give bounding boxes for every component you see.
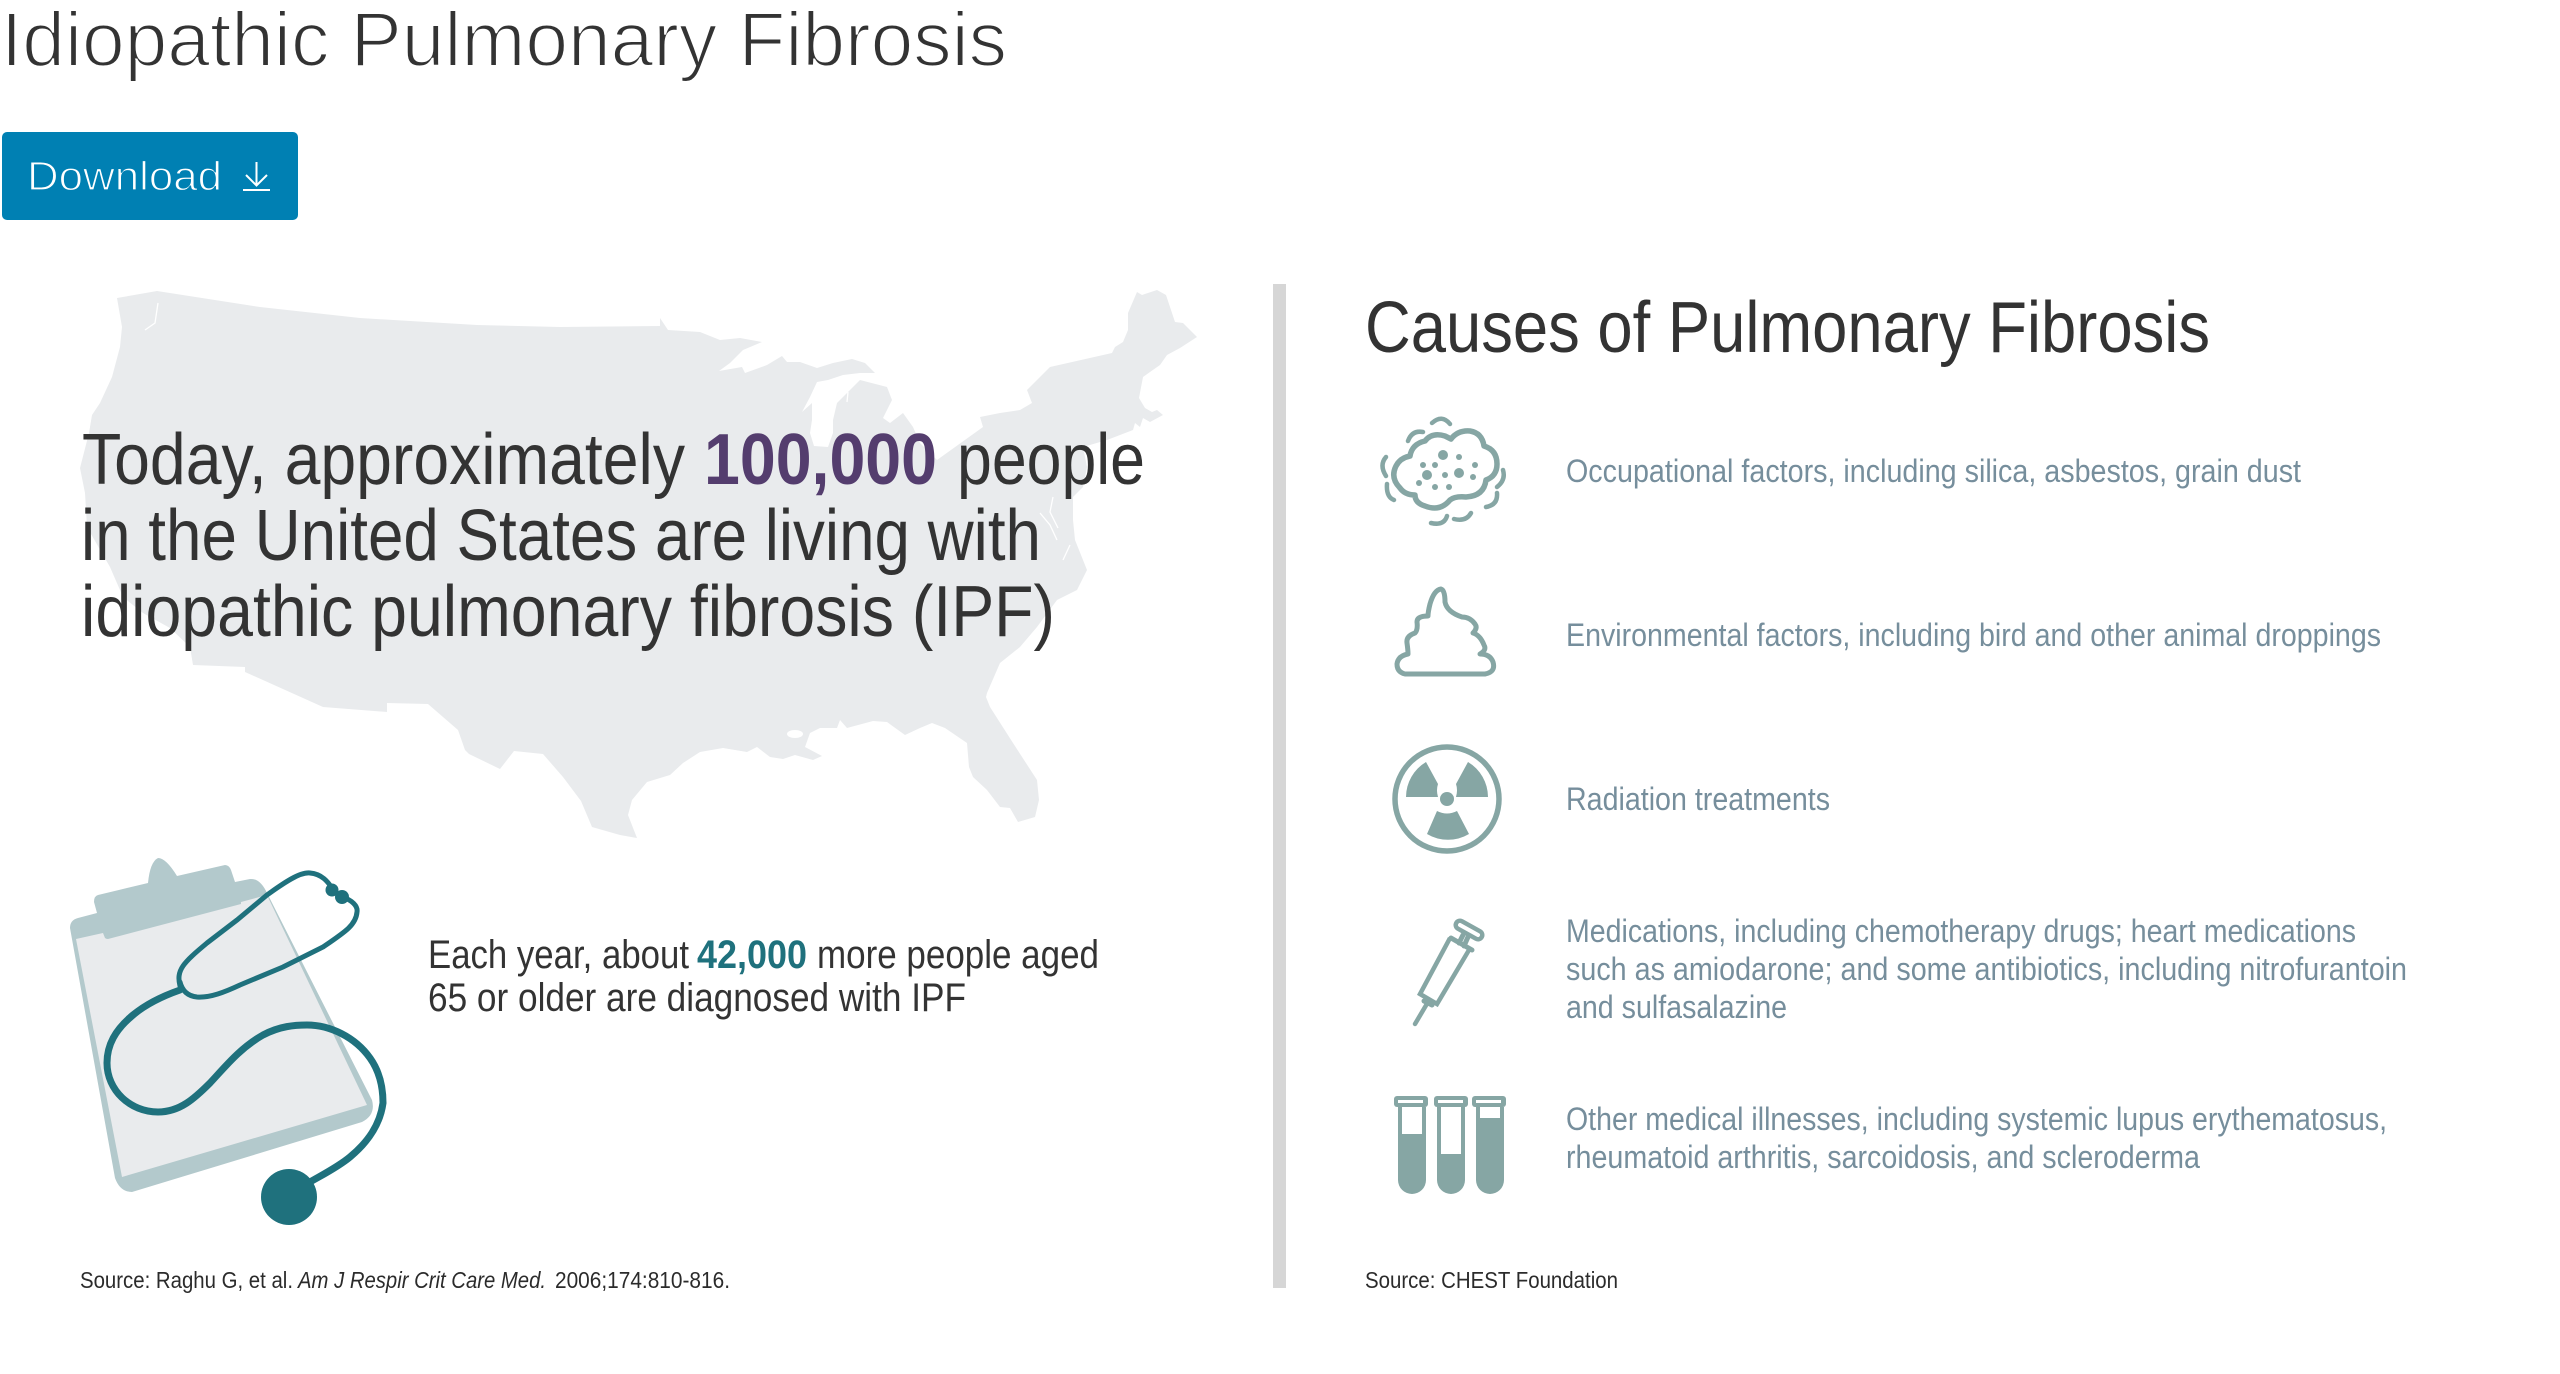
statistic text: 42,000	[697, 933, 807, 977]
cause text: medications	[1566, 913, 2407, 1025]
cause text: other illnesses: rheumatoid arthritis, sarcoidosis, and scleroderma	[1566, 1139, 2200, 1175]
cause text: medications: such as amiodarone; and some antibiotics, including nitrofurantoin	[1566, 951, 2407, 987]
cause text: other illnesses: Other medical illnesses, including systemic lupus erythematosus,	[1566, 1101, 2387, 1137]
panel divider	[1273, 284, 1286, 1288]
source: left panel	[80, 1267, 730, 1293]
icon: clipboard with stethoscope	[70, 858, 383, 1225]
panel: causes	[1365, 288, 2407, 1293]
cause text: medications: Medications, including chemotherapy drugs; heart medications	[1566, 913, 2356, 949]
statistic text: more people aged	[817, 933, 1099, 977]
cause text: medications: and sulfasalazine	[1566, 989, 1787, 1025]
icon: dust cloud	[1382, 419, 1504, 524]
headline: idiopathic pulmonary fibrosis (IPF)	[81, 572, 1055, 652]
headline: people	[957, 420, 1145, 500]
download button	[2, 132, 298, 220]
headline: 100,000	[704, 420, 937, 500]
map of the United States	[80, 290, 1197, 838]
source: left panel: Source: Raghu G, et al.	[80, 1267, 293, 1293]
source: left panel: Am J Respir Crit Care Med.	[296, 1267, 546, 1293]
headline	[81, 420, 1145, 652]
icon: droppings	[1397, 589, 1494, 674]
source: right panel: Source: CHEST Foundation	[1365, 1267, 1618, 1293]
clipboard	[70, 858, 373, 1192]
headline: in the United States are living with	[81, 496, 1041, 576]
headline: Today, approximately	[82, 420, 685, 500]
cause text: radiation: Radiation treatments	[1566, 781, 1830, 817]
cause text: environmental: Environmental factors, including bird and other animal droppings	[1566, 617, 2381, 653]
download button: Download	[27, 153, 222, 199]
icon: radiation	[1395, 747, 1499, 851]
icon: test tubes	[1394, 1096, 1506, 1194]
statistic text: 65 or older are diagnosed with IPF	[428, 976, 966, 1020]
stethoscope	[107, 873, 383, 1225]
statistic text: Each year, about	[428, 933, 689, 977]
icon: syringe	[1415, 925, 1478, 1024]
cause text: other illnesses	[1566, 1101, 2387, 1175]
source: left panel: 2006;174:810-816.	[555, 1267, 730, 1293]
causes heading: Causes of Pulmonary Fibrosis	[1365, 288, 2210, 368]
cause text: occupational: Occupational factors, including silica, asbestos, grain dust	[1566, 453, 2301, 489]
statistic text	[428, 933, 1099, 1020]
